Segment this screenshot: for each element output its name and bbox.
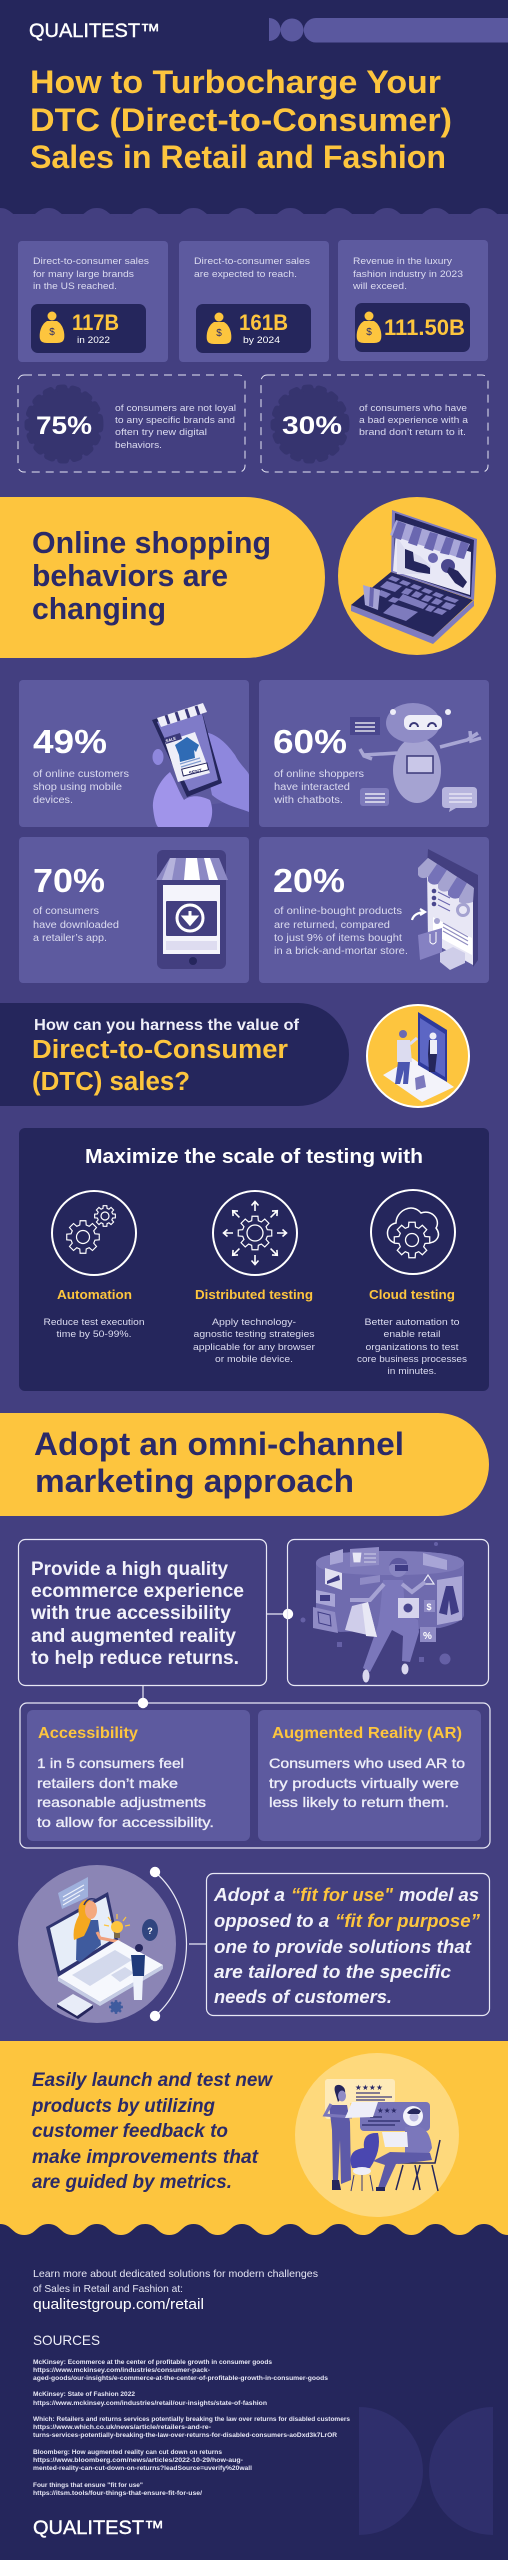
stat card: 117B — [18, 241, 168, 362]
text box: high quality ecommerce — [18, 1540, 266, 1686]
sources list: Bloomberg: How augmented reality can cut down on returns — [33, 2449, 223, 2456]
text box: fit for use: model as — [399, 1884, 479, 1905]
stat card: 161B: are expected to reach. — [194, 269, 297, 279]
stat card: 70%: have downloaded — [33, 920, 119, 931]
stat card: 49%: of online customers — [33, 769, 129, 780]
stat card: 49%: devices. — [33, 795, 73, 806]
stat card: 161B — [179, 241, 329, 362]
stat card: 111.50B: 111.50B — [384, 315, 465, 340]
card: accessibility: to allow for accessibility. — [37, 1814, 214, 1830]
icon: laptop storefront — [338, 497, 496, 655]
stat card: 20%: in a brick-and-mortar store. — [274, 946, 408, 957]
stat card: 117B: for many large brands — [33, 269, 134, 279]
heading: omni-channel: Adopt an omni-channel — [34, 1426, 404, 1462]
cloud testing column: core business processes — [357, 1354, 467, 1364]
heading: omni-channel: marketing approach — [35, 1463, 354, 1499]
stat card: 117B: 117B — [72, 310, 119, 335]
cloud testing column: Cloud testing — [369, 1288, 455, 1302]
sources list: McKinsey: State of Fashion 2022 — [33, 2391, 136, 2398]
stat card: 60%: have interacted — [274, 782, 350, 793]
call to action: Learn more about dedicated solutions for modern challenges — [33, 2268, 318, 2280]
stat card: 20% — [259, 837, 489, 983]
stat card: 70%: of consumers — [33, 906, 99, 917]
sources list: https://www.mckinsey.com/industries/retail/our-insights/state-of-fashion — [33, 2400, 267, 2407]
card: augmented reality: Consumers who used AR to — [269, 1755, 465, 1771]
text box: fit for use — [206, 1874, 490, 2016]
stat card: 111.50B: will exceed. — [352, 281, 407, 291]
stat card: 161B: $ — [216, 328, 222, 339]
sources list: Which: Retailers and returns services potentially breaking the law over returns for disabled customers — [33, 2416, 351, 2423]
image panel: AR shopper: % — [423, 1631, 432, 1642]
sources list: aged-goods/our-insights/e-commerce-at-the-center-of-profitable-growth-in-consumer-goods — [33, 2375, 329, 2382]
card: accessibility — [27, 1710, 250, 1841]
image: customer support laptop — [18, 1865, 176, 2023]
stat card: 117B: in 2022 — [77, 335, 110, 346]
band: launch and test: Easily launch and test new — [32, 2070, 273, 2091]
title: How to Turbocharge Your — [30, 64, 441, 100]
header decoration — [269, 18, 508, 42]
heading: harness DTC value: (DTC) sales? — [32, 1068, 190, 1096]
stat card: 49% — [19, 680, 249, 827]
stat card: 111.50B: $ — [366, 327, 372, 338]
panel: maximize testing — [19, 1128, 489, 1391]
stat card: 60%: with chatbots. — [273, 795, 343, 806]
card: accessibility: reasonable adjustments — [37, 1794, 206, 1810]
card: augmented reality: Augmented Reality (AR) — [272, 1725, 462, 1742]
band: launch and test: make improvements that — [32, 2147, 259, 2168]
stat card: 20%: 20% — [273, 862, 345, 899]
distributed testing column: or mobile device. — [215, 1354, 293, 1364]
header band — [0, 0, 508, 230]
heading: harness DTC value: How can you harness the value of — [34, 1017, 300, 1034]
sources list: turns-services-potentially-breaking-the-law-over-returns-for-disabled-consumers-aoDxd3k7LrOR — [33, 2432, 337, 2439]
callout: 75%: behaviors. — [115, 440, 162, 450]
text box: high quality ecommerce: Provide a high quality — [31, 1559, 228, 1580]
stat card: 117B: Direct-to-consumer sales — [33, 256, 149, 266]
text box: high quality ecommerce: ecommerce experience — [31, 1581, 244, 1602]
band: launch and test — [0, 2041, 508, 2235]
band: launch and test: customer feedback to — [32, 2121, 228, 2142]
automation column: time by 50-99%. — [56, 1329, 132, 1339]
connector: ecommerce to details — [142, 1686, 144, 1703]
call to action — [33, 2268, 318, 2313]
callout: 75%: of consumers are not loyal — [115, 403, 236, 413]
cloud testing column: organizations to test — [366, 1342, 459, 1352]
card: accessibility: 1 in 5 consumers feel — [37, 1755, 184, 1771]
image panel: AR shopper — [288, 1540, 488, 1686]
sources list: mented-reality-can-cut-down-on-returns?leadSource=uverify%20wall — [33, 2465, 252, 2472]
stat card: 49%: shop using mobile — [33, 782, 122, 793]
sources list — [33, 2359, 351, 2497]
footer logo: QUALITEST™ — [33, 2518, 164, 2539]
card: accessibility: Accessibility — [38, 1725, 138, 1742]
callout: 30% — [261, 375, 488, 472]
text box: high quality ecommerce: and augmented reality — [31, 1626, 236, 1647]
icon: phone in hand: SALE — [165, 735, 177, 743]
title — [30, 64, 452, 175]
panel: accessibility and AR — [20, 1698, 490, 1848]
icon: phone in hand — [152, 703, 249, 827]
heading: online shopping: changing — [32, 591, 166, 626]
stat card: 20%: of online-bought products — [274, 906, 402, 917]
callout: 30%: of consumers who have — [359, 403, 467, 413]
stat card: 70% — [19, 837, 249, 983]
icon: chatbot — [350, 703, 481, 812]
image panel: AR shopper: $ — [426, 1602, 432, 1612]
icon: virtual mirror shopper — [367, 1005, 469, 1107]
card: augmented reality: less likely to return them. — [269, 1794, 449, 1810]
distributed testing column: applicable for any browser — [193, 1342, 315, 1352]
stat card: 161B: by 2024 — [243, 335, 280, 346]
automation column: Reduce test execution — [44, 1317, 144, 1327]
card: augmented reality — [258, 1710, 481, 1841]
footer background — [0, 2224, 508, 2560]
icon: phone in hand: SENT — [188, 768, 203, 777]
stat card: 161B: Direct-to-consumer sales — [194, 256, 310, 266]
card: accessibility: retailers don’t make — [37, 1775, 178, 1791]
heading: online shopping: Online shopping — [32, 525, 271, 560]
callout: 75%: often try new digital — [115, 427, 207, 437]
cloud testing column: Better automation to — [364, 1317, 460, 1327]
cloud testing column — [357, 1190, 467, 1376]
stat card: 60% — [259, 680, 489, 827]
stat card: 161B: 161B — [239, 310, 288, 335]
callout: 30%: 30% — [282, 412, 342, 440]
sources list: https://itsm.tools/four-things-that-ensure-fit-for-use/ — [33, 2490, 202, 2497]
heading: omni-channel — [0, 1413, 489, 1516]
image: customer feedback people — [295, 2053, 459, 2217]
sources heading: SOURCES — [33, 2332, 100, 2348]
sources list: https://www.which.co.uk/news/article/retailers-and-re- — [33, 2424, 211, 2431]
stat card: 117B: $ — [49, 327, 55, 338]
sources list: Four things that ensure "fit for use" — [33, 2482, 143, 2489]
image: customer feedback people: ★★★★ — [355, 2083, 383, 2092]
icon: product return — [412, 849, 478, 970]
text box: fit for use: needs of customers. — [214, 1986, 392, 2007]
heading: harness DTC value — [0, 1003, 349, 1106]
panel: maximize testing: Maximize the scale of testing with — [85, 1145, 423, 1168]
text box: fit for use: one to provide solutions that — [214, 1936, 472, 1957]
cloud testing column: in minutes. — [388, 1366, 436, 1376]
distributed testing column — [193, 1191, 315, 1364]
title: DTC (Direct-to-Consumer) — [30, 102, 452, 138]
heading: online shopping — [0, 497, 325, 658]
call to action: of Sales in Retail and Fashion at: — [33, 2283, 183, 2295]
stat card: 49%: 49% — [33, 723, 107, 760]
stat card: 111.50B: Revenue in the luxury — [353, 256, 452, 266]
image: customer feedback people: ★★★ — [377, 2106, 397, 2115]
image: customer support laptop: ? — [147, 1926, 153, 1936]
distributed testing column: Apply technology- — [212, 1317, 296, 1327]
heading: online shopping: behaviors are — [32, 558, 228, 593]
distributed testing column: Distributed testing — [195, 1288, 313, 1302]
sources list: https://www.bloomberg.com/news/articles/2022-10-29/how-aug- — [33, 2457, 243, 2464]
connector: ecommerce to AR image — [267, 1609, 293, 1619]
text box: high quality ecommerce: with true accessibility — [30, 1603, 231, 1624]
text box: fit for use: are tailored to the specific — [214, 1961, 452, 1982]
call to action: qualitestgroup.com/retail — [33, 2297, 204, 2313]
stat card: 70%: a retailer’s app. — [33, 933, 107, 944]
automation column: Automation — [57, 1288, 132, 1302]
logo: QUALITEST™ — [29, 21, 160, 42]
callout: 30%: brand don’t return to it. — [359, 427, 466, 437]
icon: app download store — [156, 850, 228, 969]
card: augmented reality: try products virtually were — [269, 1775, 459, 1791]
stat card: 20%: to just 9% of items bought — [274, 933, 402, 944]
band: launch and test: are guided by metrics. — [32, 2172, 232, 2193]
distributed testing column: agnostic testing strategies — [194, 1329, 315, 1339]
callout: 75%: 75% — [36, 412, 92, 440]
automation column — [44, 1191, 144, 1339]
band: launch and test: products by utilizing — [31, 2096, 215, 2117]
stat card: 111.50B — [338, 240, 488, 361]
callout: 30%: a bad experience with a — [359, 415, 469, 425]
text box: fit for use: “fit for use" — [291, 1884, 393, 1905]
text box: fit for use: “fit for purpose” — [335, 1910, 481, 1931]
footer decoration — [359, 2407, 493, 2535]
stat card: 70%: 70% — [33, 862, 105, 899]
heading: harness DTC value: Direct-to-Consumer — [32, 1036, 288, 1064]
stat card: 111.50B: fashion industry in 2023 — [353, 269, 463, 279]
stat card: 60%: of online shoppers — [274, 769, 364, 780]
text box: fit for use: opposed to a — [214, 1910, 329, 1931]
stat card: 117B: in the US reached. — [33, 281, 117, 291]
sources list: https://www.mckinsey.com/industries/consumer-pack- — [33, 2367, 210, 2374]
stat card: 20%: are returned, compared — [274, 920, 390, 931]
cloud testing column: enable retail — [384, 1329, 440, 1339]
stat card: 60%: 60% — [273, 723, 347, 760]
title: Sales in Retail and Fashion — [30, 139, 446, 175]
text box: fit for use: Adopt a — [213, 1884, 285, 1905]
callout: 75%: to any specific brands and — [115, 415, 235, 425]
sources list: McKinsey: Ecommerce at the center of profitable growth in consumer goods — [33, 2359, 273, 2366]
text box: high quality ecommerce: to help reduce returns. — [31, 1648, 239, 1669]
connector arc — [150, 1867, 206, 2021]
callout: 75% — [18, 375, 245, 472]
